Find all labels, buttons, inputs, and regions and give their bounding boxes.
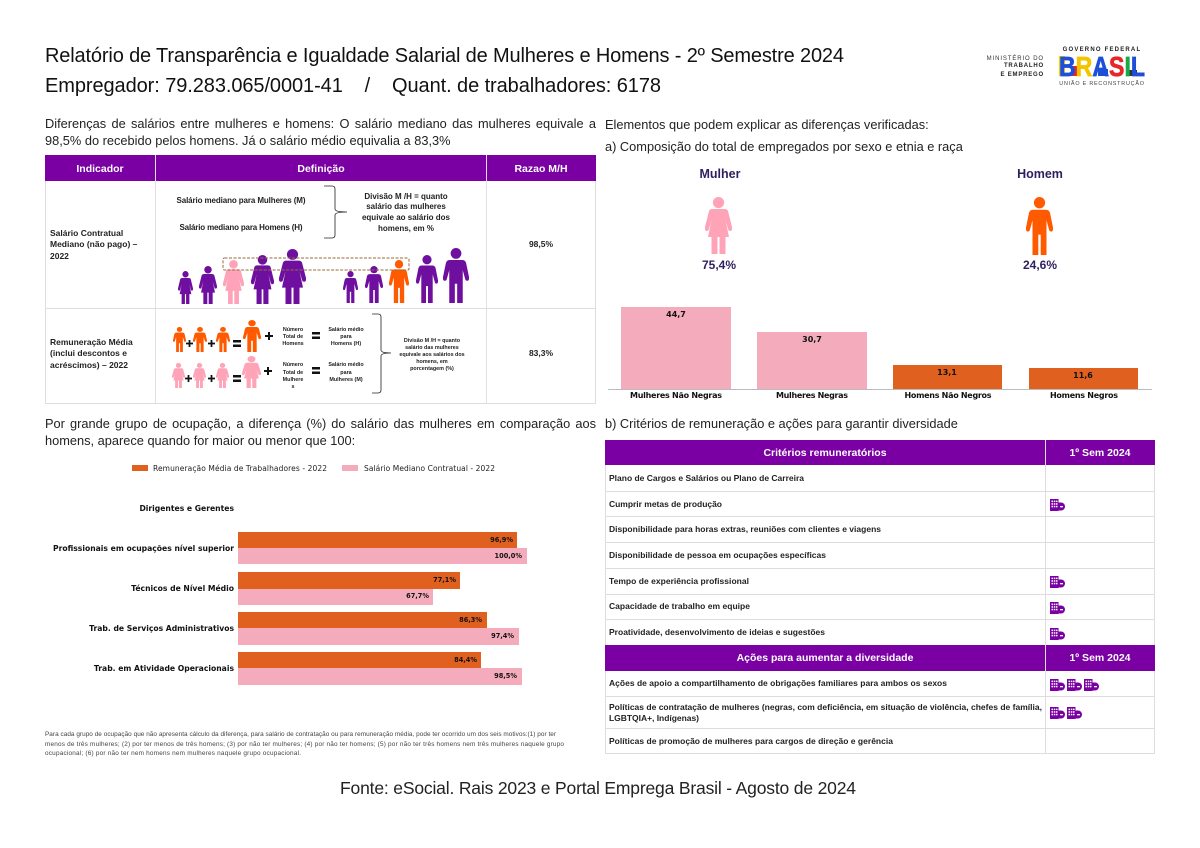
panel: criteria table [605, 440, 1155, 754]
table headers [76, 163, 568, 175]
bar chart: occupations: 96,9% [490, 536, 513, 544]
icons: women line-up [178, 249, 306, 304]
subheading: elements: Elementos que podem explicar as diferenças verificadas: [605, 117, 929, 132]
bar chart: composition: 13,1 [937, 368, 957, 377]
table headers: Razao M/H [514, 163, 568, 175]
panel: mulher [700, 167, 741, 272]
icons: criteria [1050, 499, 1065, 640]
panel: homem [1017, 167, 1063, 272]
definition: division text: equivale ao salário dos [362, 213, 451, 222]
footnote: ocupacional; (6) por não ter nem homens nem mulheres naquele grupo ocupacional. [45, 750, 301, 757]
definition: mediano text: Salário mediano para Mulheres (M) [176, 196, 306, 205]
bar chart: composition [608, 307, 1152, 400]
text block: salary difference: Diferenças de salários entre mulheres e homens: O salário mediano das mulheres equivale a 98,5% do recebido pelos homens. Já o salário médio equivalia a 83,3% [45, 116, 596, 148]
bar chart: occupations: 100,0% [495, 552, 522, 560]
logo: ministério: E EMPREGO [1000, 72, 1044, 78]
definition: division text: salário das mulheres [405, 345, 459, 351]
actions rows: Ações de apoio a compartilhamento de obrigações familiares para ambos os sexos [609, 678, 947, 688]
text block: occupation intro: Por grande grupo de ocupação, a diferença (%) do salário das mulheres em comparação aos homens, aparece quando for maior ou menor que 100: [45, 416, 596, 448]
definition: division text: Divisão M /H = quanto [364, 192, 448, 201]
bar chart: composition: Homens Negros [1050, 391, 1118, 400]
equation: men [173, 320, 364, 352]
criteria rows: Cumprir metas de produção [609, 499, 722, 509]
equation: men: Homens (H) [331, 341, 361, 347]
title [45, 45, 844, 97]
criteria rows: Tempo de experiência profissional [609, 576, 749, 586]
brace [324, 186, 347, 238]
logo: governo federal brasil: UNIÃO E RECONSTRUÇÃO [1059, 80, 1145, 87]
logo: ministério: TRABALHO [1004, 63, 1044, 69]
logo: ministério: MINISTÉRIO DO [987, 55, 1044, 62]
source line: Fonte: eSocial. Rais 2023 e Portal Emprega Brasil - Agosto de 2024 [340, 778, 856, 798]
criteria rows: Disponibilidade de pessoa em ocupações específicas [609, 550, 826, 560]
definition: division text: Divisão M /H = quanto [404, 338, 461, 344]
bar chart: occupations: Profissionais em ocupações nível superior [53, 544, 234, 553]
criteria rows: Disponibilidade para horas extras, reuniões com clientes e viagens [609, 524, 881, 534]
bar chart: composition: Mulheres Negras [776, 391, 848, 400]
row label: remuneração média [50, 337, 133, 370]
definition: division text: homens, em % [378, 224, 434, 233]
header: semester: 1º Sem 2024 [1069, 652, 1131, 664]
bar chart: occupations: 84,4% [454, 656, 477, 664]
actions rows: Políticas de contratação de mulheres (negras, com deficiência, em situação de violência, chefes de família, [609, 702, 1042, 712]
bar chart: occupations: 98,5% [494, 672, 517, 680]
equation: men: para [340, 334, 353, 340]
equation: men: Salário médio [328, 327, 364, 333]
row label: remuneração média: Remuneração Média [50, 337, 133, 347]
definition: division text: porcentagem (%) [410, 366, 454, 372]
bar chart: occupations: 97,4% [491, 632, 514, 640]
actions rows [609, 678, 1042, 746]
bar chart: occupations: Dirigentes e Gerentes [139, 504, 234, 513]
icons: men line-up [343, 248, 469, 303]
panel: mulher: Mulher [700, 167, 741, 181]
definition: mediano text [176, 196, 306, 232]
title: Empregador: 79.283.065/0001-41 / Quant. de trabalhadores: 6178 [45, 75, 661, 97]
definition: division text [362, 192, 451, 233]
chart legend: Salário Mediano Contratual - 2022 [364, 464, 495, 473]
bar chart: occupations: Trab. em Atividade Operacionais [94, 664, 234, 673]
logo: governo federal brasil: GOVERNO FEDERAL [1063, 47, 1141, 53]
criteria rows: Capacidade de trabalho em equipe [609, 601, 750, 611]
brace [372, 314, 391, 393]
icons: actions [1050, 679, 1099, 719]
row label: salário contratual: 2022 [50, 251, 69, 261]
actions rows: Políticas de promoção de mulheres para cargos de direção e gerência [609, 736, 893, 746]
definition: division text [399, 338, 465, 372]
equation: women [172, 356, 364, 390]
subheading: b: b) Critérios de remuneração e ações para garantir diversidade [605, 416, 958, 431]
bar chart: composition: Homens Não Negros [904, 391, 992, 400]
equation: men: Número [283, 327, 304, 333]
logo: ministério [987, 55, 1044, 78]
median highlight box [223, 258, 409, 270]
bar chart: occupations: Técnicos de Nível Médio [131, 584, 234, 593]
bar chart: occupations: 67,7% [406, 592, 429, 600]
panel: mulher: 75,4% [702, 258, 736, 272]
title: Relatório de Transparência e Igualdade Salarial de Mulheres e Homens - 2º Semestre 2024 [45, 45, 844, 67]
header: semester: 1º Sem 2024 [1069, 447, 1131, 459]
definition: division text: homens, em [416, 359, 448, 365]
subheading: a: a) Composição do total de empregados por sexo e etnia e raça [605, 139, 964, 154]
bar chart: composition: 11,6 [1073, 371, 1093, 380]
criteria rows [609, 473, 881, 637]
row label: remuneração média: acréscimos) – 2022 [50, 360, 128, 370]
value: 83,3%: 83,3% [529, 348, 553, 358]
bar chart: occupations: 86,3% [459, 616, 482, 624]
bar chart: composition: 44,7 [666, 310, 686, 319]
table headers: Indicador [76, 163, 124, 175]
bar chart: composition: Mulheres Não Negras [630, 391, 722, 400]
chart legend [132, 464, 495, 473]
definition: division text: equivale aos salários dos [399, 352, 465, 358]
bar chart: occupations: 77,1% [433, 576, 456, 584]
footnote [45, 731, 564, 757]
equation: women: para [340, 370, 353, 376]
equation: men: Homens [282, 341, 304, 347]
chart legend: Remuneração Média de Trabalhadores - 2022 [153, 464, 327, 473]
header: ações: Ações para aumentar a diversidade [737, 652, 914, 664]
equation: women: s [292, 384, 294, 390]
row label: remuneração média: (inclui descontos e [50, 348, 127, 358]
equation: women: Total de [283, 370, 303, 376]
equation: women: Número [283, 362, 304, 368]
equation: women: Salário médio [328, 362, 364, 368]
row label: salário contratual [50, 228, 138, 261]
panel: homem: Homem [1017, 167, 1063, 181]
footnote: Para cada grupo de ocupação que não apresenta cálculo da diferença, para salário de contratação ou para remuneração média, pode ter ocorrido um dos seis motivos:(1) por ter [45, 731, 557, 738]
panel: table of indicators [45, 155, 596, 404]
equation: women: Mulheres (M) [329, 377, 363, 383]
definition: mediano text: Salário mediano para Homens (H) [180, 223, 303, 232]
row label: salário contratual: Mediano (não pago) – [50, 239, 138, 249]
bar chart: composition: 30,7 [802, 335, 822, 344]
panel: homem: 24,6% [1023, 258, 1057, 272]
row label: salário contratual: Salário Contratual [50, 228, 123, 238]
equation: women: Mulhere [283, 377, 303, 383]
footnote: menos de três mulheres; (2) por ter menos de três homens; (3) por não ter mulheres; (4) por não ter homens; (5) por não ter três homens nem três mulheres naquele grupo [45, 741, 564, 748]
header: critérios: Critérios remuneratórios [763, 447, 887, 459]
bar chart: occupations [53, 504, 527, 685]
actions rows: LGBTQIA+, Indígenas) [609, 713, 699, 723]
criteria rows: Plano de Cargos e Salários ou Plano de Carreira [609, 473, 804, 483]
equation: men: Total de [283, 334, 303, 340]
bar chart: occupations: Trab. de Serviços Administrativos [89, 624, 234, 633]
definition: division text: salário das mulheres [366, 202, 446, 211]
criteria rows: Proatividade, desenvolvimento de ideias e sugestões [609, 627, 825, 637]
table headers: Definição [297, 163, 345, 175]
value: 98,5%: 98,5% [529, 239, 553, 249]
logo: governo federal brasil: BRASIL [1059, 51, 1145, 82]
